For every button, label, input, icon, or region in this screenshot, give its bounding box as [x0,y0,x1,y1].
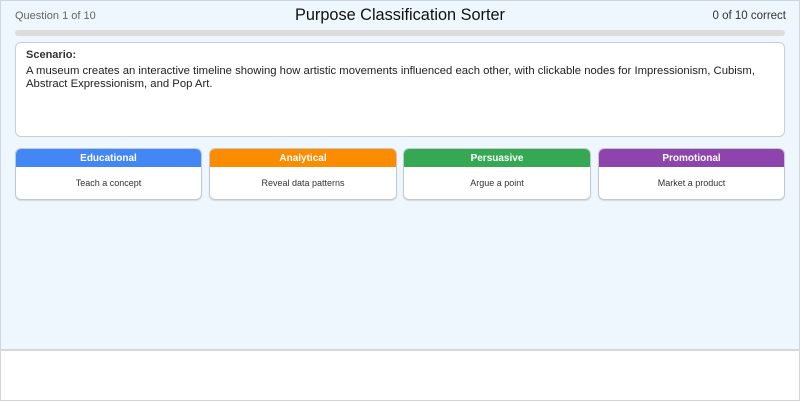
card: persuasive: Persuasive [471,153,523,164]
card: educational [15,148,202,200]
card: educational: Teach a concept [76,178,141,188]
title: Purpose Classification Sorter [295,6,505,24]
card: promotional: Market a product [658,178,725,188]
card: educational: Educational [80,153,137,164]
card: promotional [598,148,785,200]
card: persuasive: Argue a point [470,178,524,188]
card: analytical: Analytical [279,153,327,164]
scenario text: A museum creates an interactive timeline showing how artistic movements influenced each other, with clickable nodes for Impressionism, Cubism, Abstract Expressionism, and Pop Art. [26,65,755,90]
question counter: Question 1 of 10 [15,10,96,22]
card: analytical: Reveal data patterns [261,178,345,188]
card: analytical [209,148,397,200]
card: promotional: Promotional [662,153,721,164]
scenario panel [15,42,785,137]
scenario heading: Scenario: [26,49,76,61]
card: persuasive [403,148,591,200]
progress bar [15,30,785,36]
score: 0 of 10 correct [712,10,786,22]
footer area [0,349,800,401]
